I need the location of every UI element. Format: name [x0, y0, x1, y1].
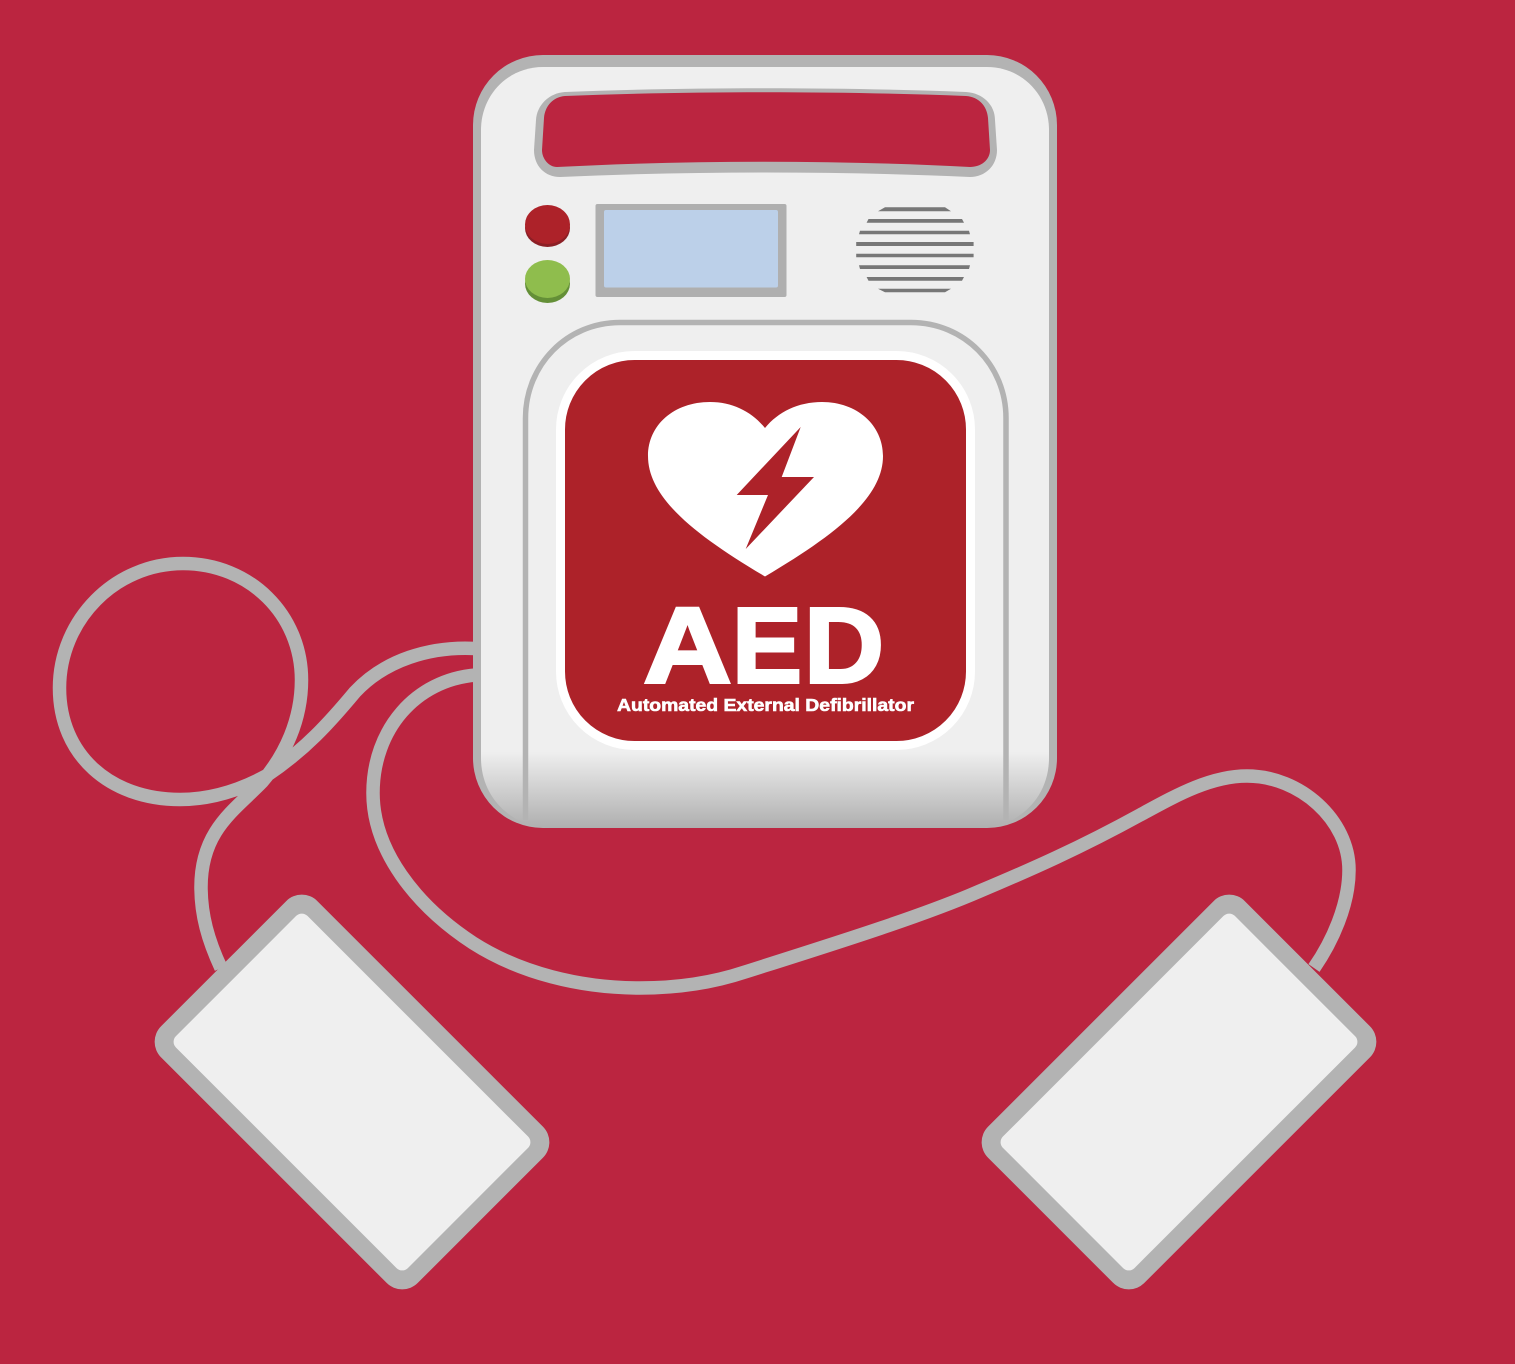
AED sign	[560, 356, 970, 746]
front cover outline	[526, 322, 1006, 820]
indicator: red button	[525, 205, 570, 247]
indicator: green button	[525, 260, 570, 303]
cable: left loop to left pad	[60, 564, 476, 968]
AED heading: E	[732, 584, 802, 706]
cable: to right pad	[373, 675, 1349, 988]
AED subtitle: Automated External Defibrillator	[617, 695, 914, 715]
AED heading: A	[643, 584, 732, 706]
left electrode pad	[146, 886, 558, 1298]
right electrode pad	[973, 886, 1385, 1298]
icon: heart with lightning bolt	[648, 402, 883, 576]
AED heading	[643, 584, 884, 706]
carrying handle	[534, 88, 997, 177]
AED heading: D	[804, 584, 884, 706]
display screen	[596, 204, 786, 297]
device body	[473, 55, 1057, 828]
speaker grille	[856, 207, 974, 292]
